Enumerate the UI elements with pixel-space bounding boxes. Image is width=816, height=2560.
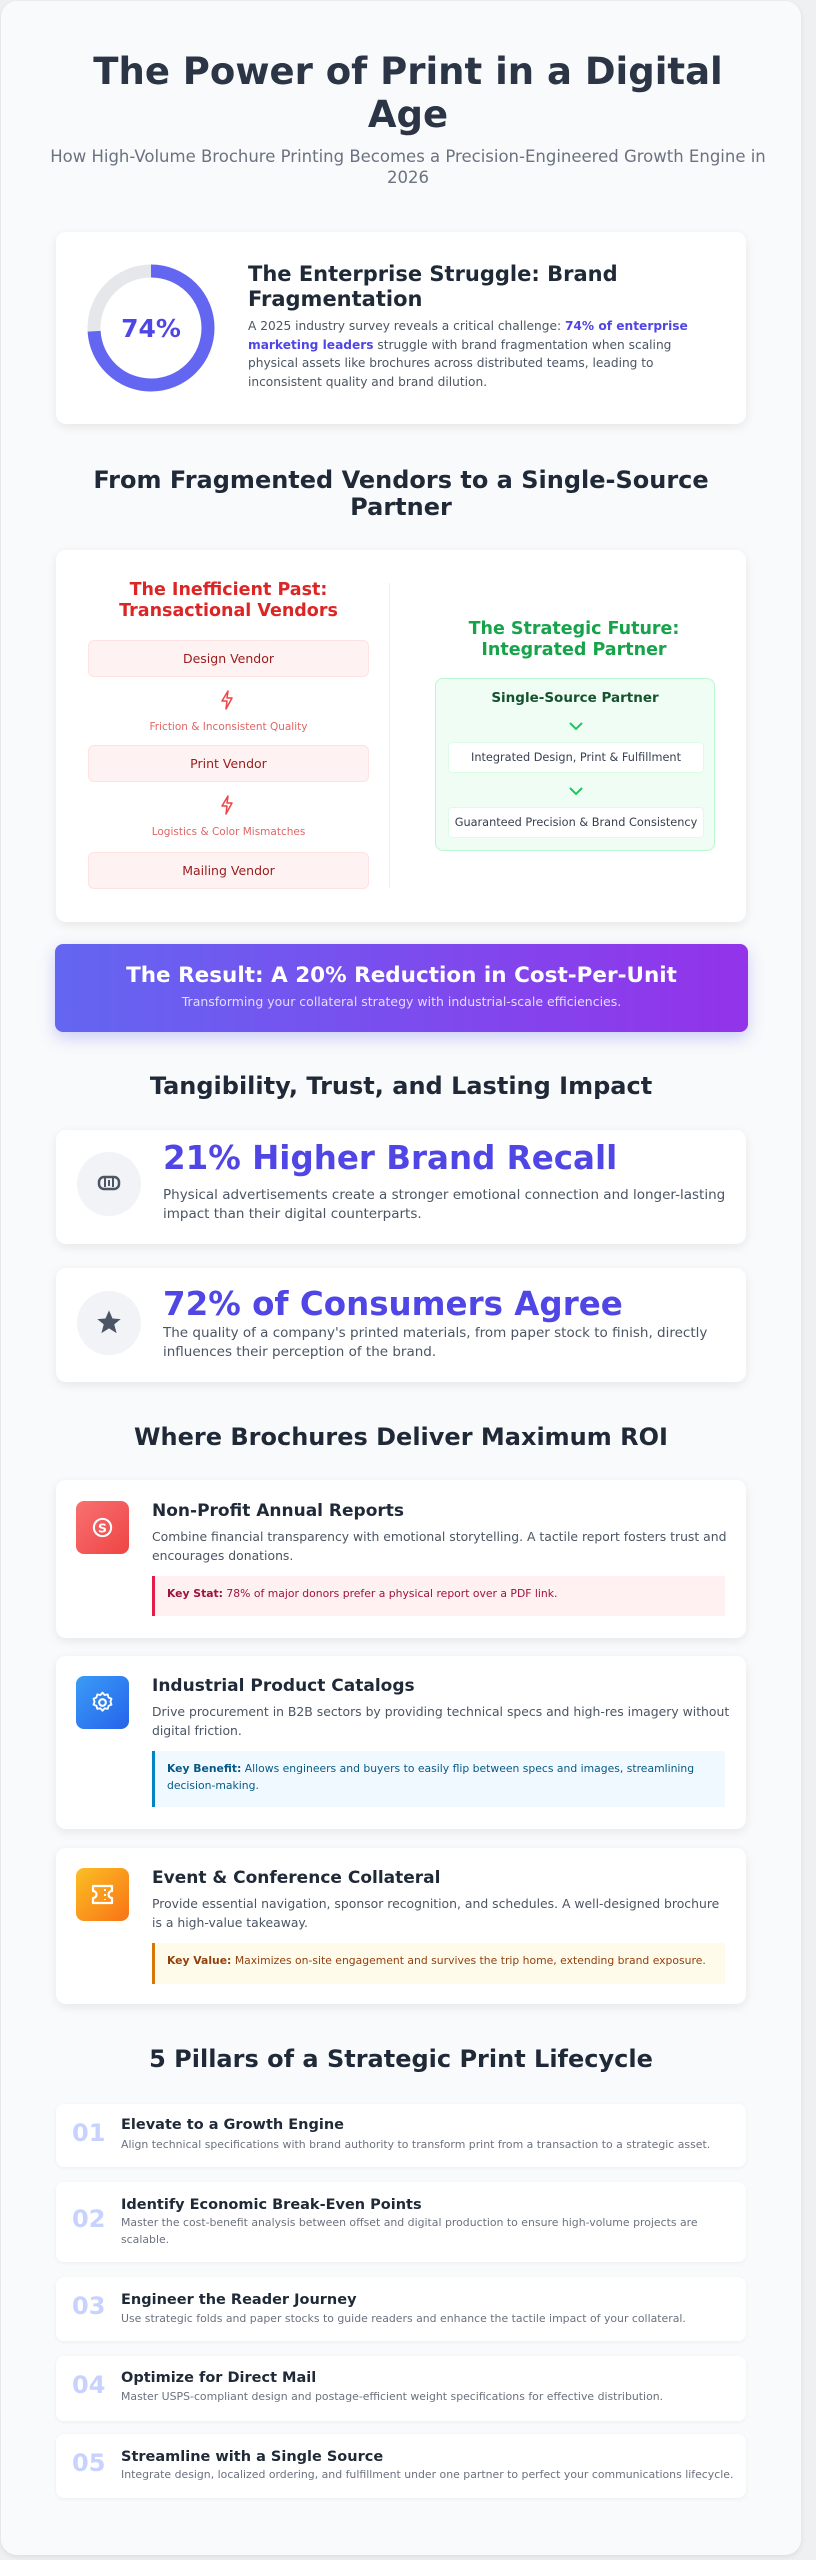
panel: comparison	[56, 550, 746, 922]
icon: gear	[76, 1676, 129, 1729]
pillar 01: Elevate to a Growth Engine	[121, 2117, 344, 2133]
pillar 04: Optimize for Direct Mail	[121, 2370, 316, 2386]
mailing vendor	[88, 852, 369, 889]
callout: key stat: Key Stat: 78% of major donors prefer a physical report over a PDF link.	[167, 1587, 557, 1600]
body: Drive procurement in B2B sectors by providing technical specs and high-res imagery without digital friction.	[152, 1704, 729, 1738]
divider	[389, 583, 390, 888]
pillar 02: Master the cost-benefit analysis between offset and digital production to ensure high-volume projects are scalable.	[121, 2216, 698, 2246]
pillar 05	[56, 2434, 746, 2498]
pillar 04	[56, 2356, 746, 2421]
mailing vendor: Mailing Vendor	[182, 863, 275, 878]
green single-source box	[435, 678, 715, 851]
step 1	[448, 742, 704, 773]
icon: bolt	[221, 690, 233, 710]
pillar 05: Streamline with a Single Source	[121, 2449, 383, 2465]
pillar 01: 01	[72, 2119, 105, 2147]
stat heading: 72% of Consumers Agree	[163, 1285, 623, 1323]
logistics label: Logistics & Color Mismatches	[152, 826, 305, 838]
subtitle: How High-Volume Brochure Printing Becomes a Precision-Engineered Growth Engine in 2026	[50, 147, 766, 187]
callout: key value	[152, 1943, 725, 1984]
panel: enterprise struggle	[56, 232, 746, 424]
panel: event	[56, 1848, 746, 2004]
chevron	[569, 722, 583, 730]
friction label: Friction & Inconsistent Quality	[150, 721, 307, 733]
step 2	[448, 807, 704, 838]
pillar 03: 03	[72, 2292, 105, 2320]
stat heading: 21% Higher Brand Recall	[163, 1139, 617, 1177]
heading: fragmented to single source: From Fragmented Vendors to a Single-Source Partner	[93, 466, 709, 521]
icon: ticket	[76, 1868, 129, 1921]
panel: consumers agree	[56, 1268, 746, 1382]
icon: bolt	[221, 795, 233, 815]
design vendor: Design Vendor	[183, 651, 274, 666]
heading: The Enterprise Struggle: Brand Fragmentation	[248, 262, 618, 311]
pillar 03: Engineer the Reader Journey	[121, 2292, 357, 2308]
title: Event & Conference Collateral	[152, 1868, 440, 1888]
pillar 05: Integrate design, localized ordering, and fulfillment under one partner to perfect your communications lifecycle.	[121, 2468, 733, 2481]
heading red: The Inefficient Past: Transactional Vendors	[119, 580, 338, 621]
heading: tangibility: Tangibility, Trust, and Lasting Impact	[150, 1072, 652, 1100]
callout: key value: Key Value: Maximizes on-site engagement and survives the trip home, extending brand exposure.	[167, 1954, 706, 1967]
donut chart 74%	[88, 264, 214, 392]
print vendor: Print Vendor	[190, 756, 267, 771]
pillar 02: 02	[72, 2205, 105, 2233]
pillar 01: Align technical specifications with brand authority to transform print from a transaction to a strategic asset.	[121, 2138, 710, 2151]
pillar 01	[56, 2104, 746, 2167]
pillar 03	[56, 2277, 746, 2341]
title: Industrial Product Catalogs	[152, 1676, 415, 1696]
icon: dollar: S	[98, 1520, 107, 1535]
pillar 02	[56, 2182, 746, 2262]
stat text: The quality of a company's printed materials, from paper stock to finish, directly influences their perception of the brand.	[163, 1325, 707, 1360]
panel: industrial	[56, 1656, 746, 1829]
result banner	[55, 944, 748, 1032]
panel: brand recall	[56, 1130, 746, 1244]
callout: key benefit	[152, 1751, 725, 1807]
callout: key benefit: Key Benefit: Allows engineers and buyers to easily flip between specs and images, streamlining decision-making.	[167, 1762, 694, 1792]
design vendor	[88, 640, 369, 677]
donut chart 74%: 74%	[121, 314, 181, 343]
banner title: The Result: A 20% Reduction in Cost-Per-Unit	[126, 963, 677, 988]
pillar 05: 05	[72, 2449, 105, 2477]
pillar 03: Use strategic folds and paper stocks to guide readers and enhance the tactile impact of your collateral.	[121, 2312, 686, 2325]
pillar 04: 04	[72, 2371, 105, 2399]
body: Provide essential navigation, sponsor recognition, and schedules. A well-designed brochure is a high-value takeaway.	[152, 1896, 719, 1930]
pillar 02: Identify Economic Break-Even Points	[121, 2197, 422, 2213]
print vendor	[88, 745, 369, 782]
banner subtitle: Transforming your collateral strategy with industrial-scale efficiencies.	[182, 994, 621, 1009]
heading green: The Strategic Future: Integrated Partner	[469, 619, 679, 660]
chevron	[569, 787, 583, 796]
panel: non-profit	[56, 1480, 746, 1638]
heading: ROI: Where Brochures Deliver Maximum ROI	[134, 1423, 668, 1451]
heading: 5 pillars: 5 Pillars of a Strategic Print Lifecycle	[149, 2045, 653, 2073]
icon: star circle	[77, 1291, 141, 1355]
box title: Single-Source Partner	[491, 690, 659, 706]
stat text: Physical advertisements create a stronger emotional connection and longer-lasting impact than their digital counterparts.	[163, 1187, 725, 1222]
title: Non-Profit Annual Reports	[152, 1501, 404, 1521]
callout: key stat	[152, 1576, 725, 1616]
icon: brain circle	[77, 1152, 141, 1216]
icon: dollar	[76, 1501, 129, 1554]
step 1: Integrated Design, Print & Fulfillment	[471, 751, 681, 764]
body: Combine financial transparency with emotional storytelling. A tactile report fosters trust and encourages donations.	[152, 1529, 726, 1562]
step 2: Guaranteed Precision & Brand Consistency	[455, 816, 697, 829]
title: The Power of Print in a Digital Age	[93, 50, 723, 136]
body text: A 2025 industry survey reveals a critical challenge: 74% of enterprise marketing leaders struggle with brand fragmentation when scaling physical assets like brochures across distributed teams, leading to inconsistent quality and brand dilution.	[248, 319, 688, 389]
pillar 04: Master USPS-compliant design and postage-efficient weight specifications for effective distribution.	[121, 2390, 663, 2403]
